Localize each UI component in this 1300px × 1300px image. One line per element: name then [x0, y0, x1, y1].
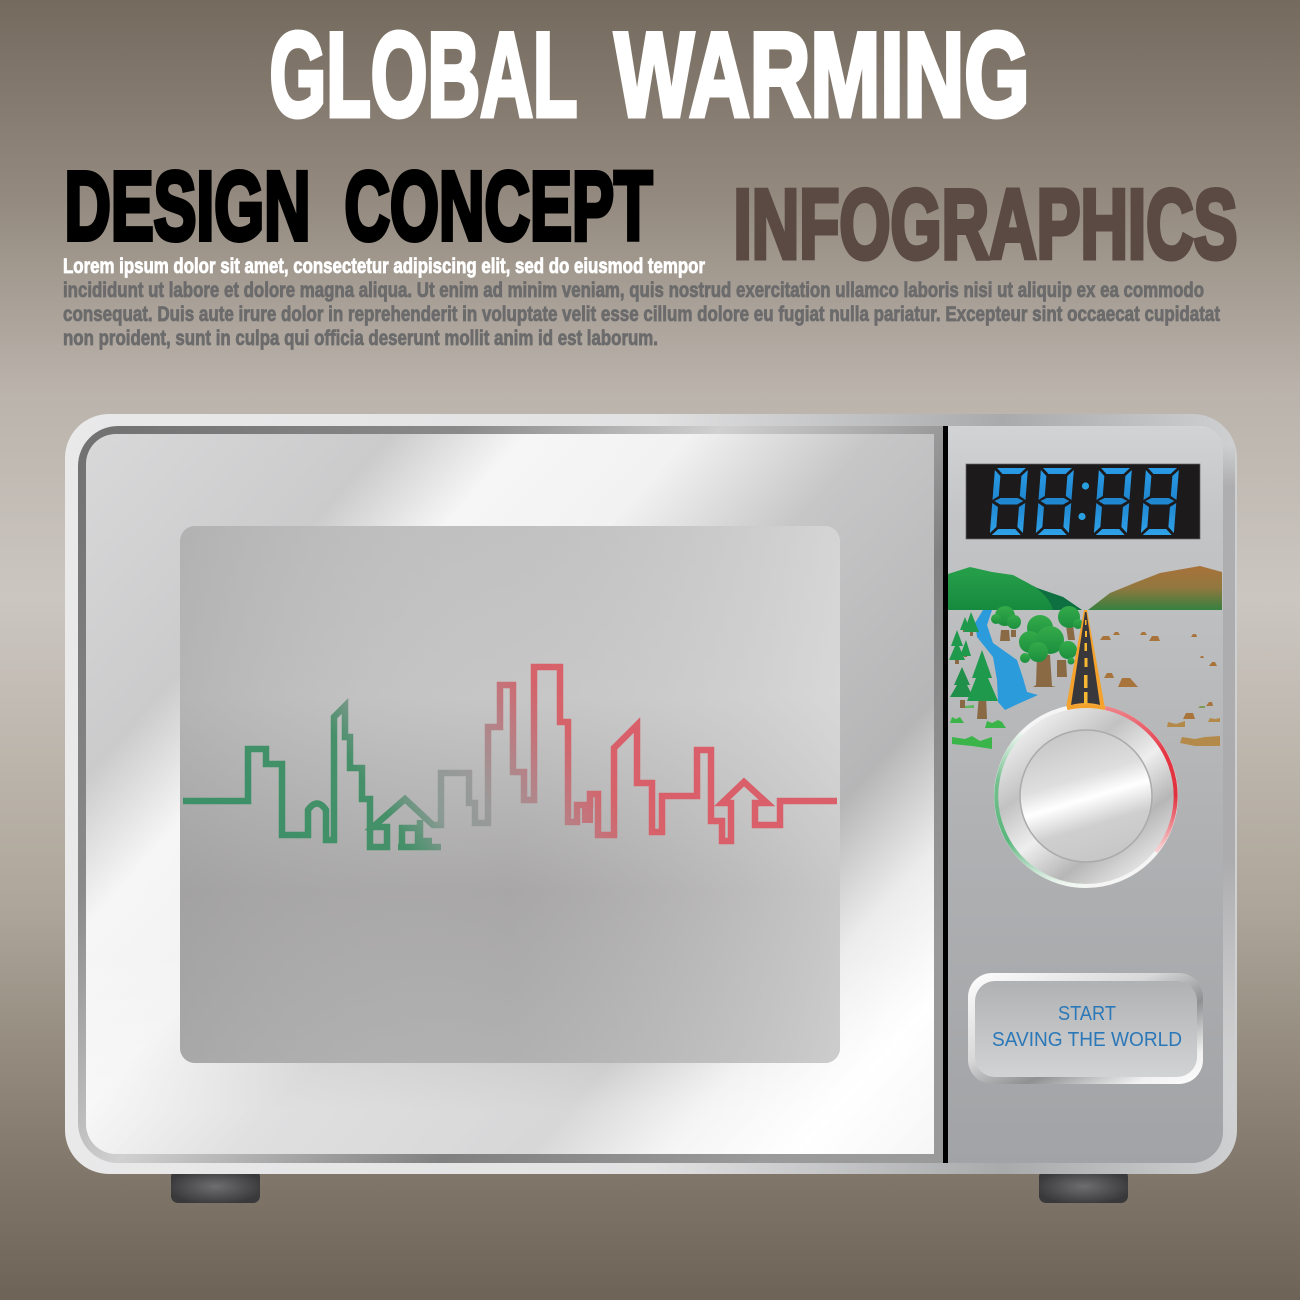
road: [1066, 610, 1105, 708]
heading: design concept: DESIGN: [64, 152, 310, 260]
pine trees: [949, 612, 998, 719]
button label: [992, 1003, 1182, 1051]
text block: lorem ipsum: Lorem ipsum dolor sit amet, consectetur adipiscing elit, sed do eiusmod tempor: [63, 255, 705, 278]
dial ring: [996, 706, 1176, 886]
button label: START: [1058, 1003, 1116, 1025]
digit 4: [1141, 468, 1179, 535]
door face: [86, 434, 934, 1154]
title: GLOBAL: [270, 8, 578, 142]
start button: [968, 973, 1203, 1084]
title: [270, 8, 1030, 142]
dial centre: [1020, 730, 1152, 862]
broadleaf trees: [991, 606, 1083, 687]
foot: right: [1039, 1170, 1128, 1203]
door window: [180, 526, 840, 1063]
foot: left: [171, 1170, 260, 1203]
digit 3: [1094, 468, 1132, 535]
door divider: [943, 426, 948, 1163]
door frame: [78, 426, 944, 1163]
grass: green: [950, 705, 1006, 749]
city skyline outline: [183, 667, 837, 847]
text block: lorem ipsum: [63, 255, 1220, 350]
button label: SAVING THE WORLD: [992, 1029, 1182, 1051]
heading: design concept: [64, 152, 652, 260]
text block: lorem ipsum: non proident, sunt in culpa qui officia deserunt mollit anim id est laborum.: [63, 327, 658, 350]
tree stumps: [1100, 632, 1217, 719]
digit 1: [990, 468, 1028, 535]
landscape illustration: [948, 566, 1222, 749]
grass: dry: [1167, 706, 1220, 746]
brown hill: [1088, 566, 1222, 610]
digital display: [966, 464, 1200, 539]
microwave casing: [65, 414, 1237, 1174]
panel side strip: [1223, 445, 1235, 1135]
colon: [1078, 482, 1089, 520]
green hill: [948, 567, 1082, 610]
heading: design concept: CONCEPT: [344, 152, 652, 260]
digit 2: [1036, 468, 1074, 535]
timer dial: [996, 706, 1176, 886]
title: WARMING: [614, 8, 1030, 142]
microwave oven: [65, 414, 1237, 1203]
control panel: [948, 426, 1223, 1163]
river: [975, 610, 1038, 710]
